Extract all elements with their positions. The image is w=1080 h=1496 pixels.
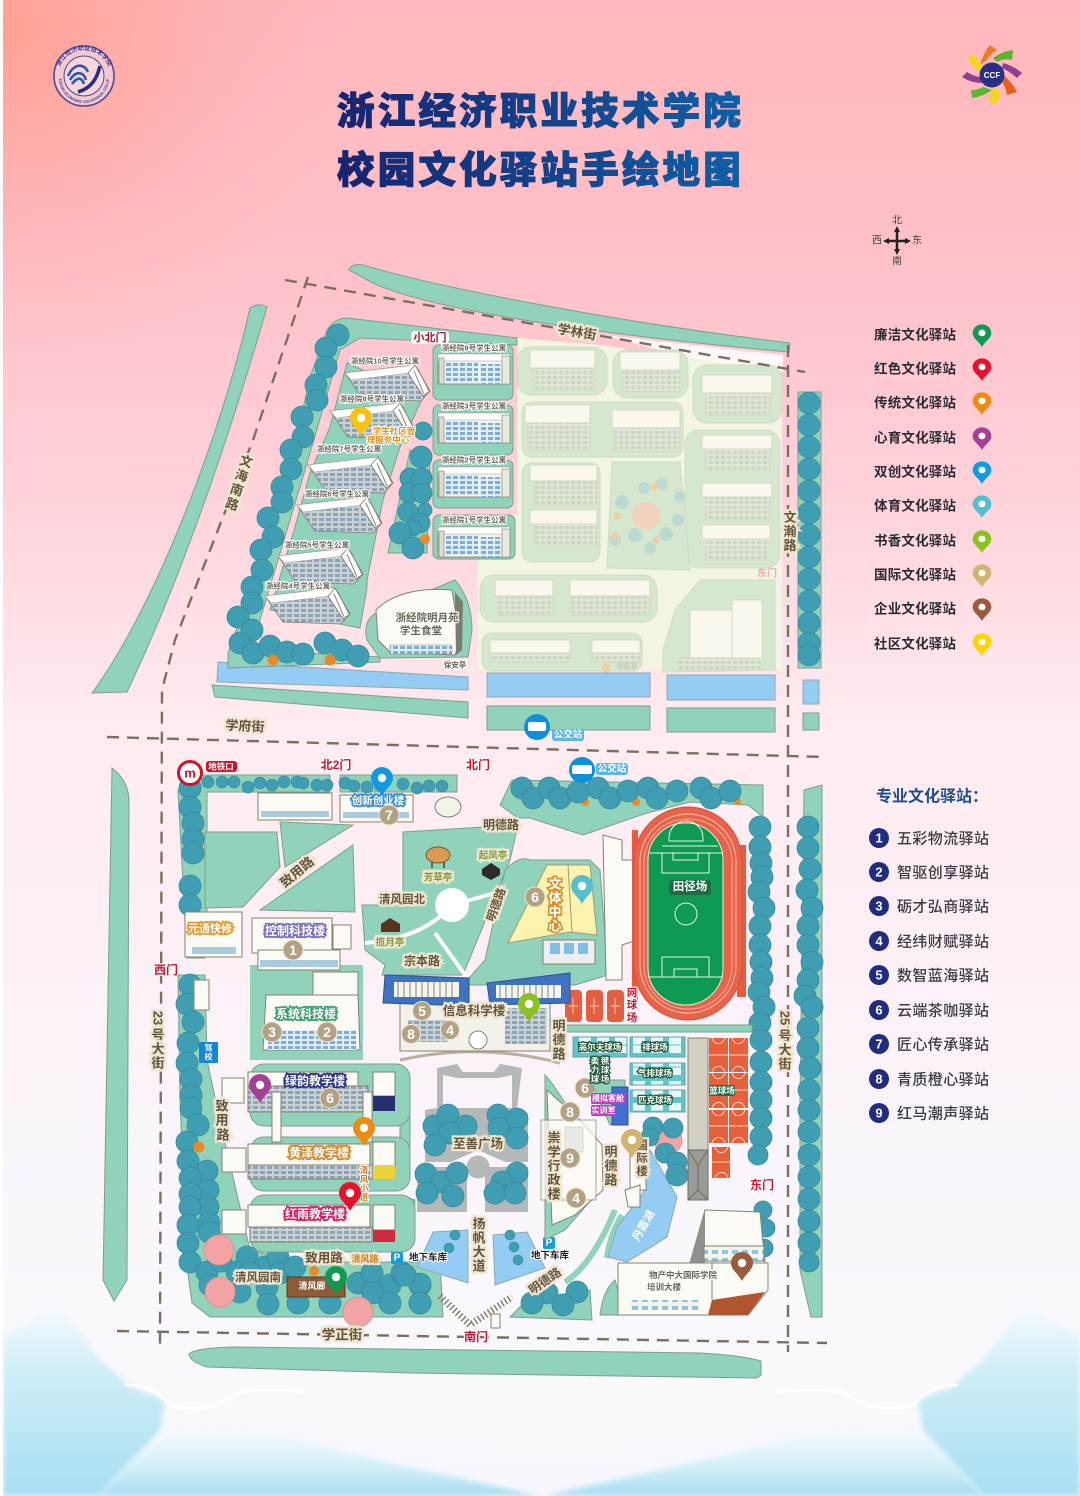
administration building: 行 (547, 1158, 561, 1174)
pin: innovation station (371, 767, 393, 796)
sports and arts centre (508, 865, 597, 964)
international building small: 际 (636, 1151, 648, 1165)
tennis courts: 场 (627, 1011, 638, 1024)
parking east: 地下车库 (531, 1250, 569, 1262)
list item 7 (869, 1034, 989, 1054)
list item 9 (869, 1103, 989, 1123)
upper map labels: 文 (783, 510, 797, 524)
badge 4 admin: 4 (572, 1190, 580, 1206)
east street label: 街 (778, 1056, 792, 1072)
badge 6 teaching: 6 (326, 1090, 334, 1106)
faded eastern dormitory zone (478, 335, 783, 672)
legend item: sports (874, 495, 991, 518)
south-west labels: 清风路 (351, 1253, 379, 1264)
compass (872, 214, 922, 268)
south-west labels: 致用路 (305, 1250, 343, 1265)
east street label (778, 1011, 792, 1072)
dorm zone: orange shrubs (268, 534, 430, 666)
international building small: 国 (636, 1139, 648, 1152)
metro entrance (178, 761, 237, 784)
parking east: P (546, 1238, 553, 1248)
administration building: 崇 (547, 1130, 561, 1146)
compass: 东 (912, 234, 922, 246)
list item 2: 2 (875, 864, 883, 880)
south-west labels: 用 (215, 1112, 229, 1128)
campus: pink trees (204, 1126, 682, 1327)
badge 9 admin (560, 1148, 580, 1168)
campus: north tree band (178, 775, 763, 1320)
sports courts: 毽 (601, 1056, 610, 1066)
badge 2: 2 (323, 1024, 331, 1040)
compass: 西 (872, 236, 882, 246)
bus stop lower (569, 757, 628, 783)
simulated cabin training room: 模拟客舱 (592, 1093, 624, 1103)
upper map labels: 路 (224, 495, 241, 513)
metro entrance: m (184, 766, 196, 780)
yellow-ze teaching building: 道 (360, 1192, 369, 1202)
list item 3: 3 (875, 898, 883, 914)
simulated cabin training room: 实训室 (592, 1105, 616, 1115)
sports courts: 柔 (591, 1056, 600, 1066)
plaza labels: 至善广场 (453, 1136, 503, 1151)
list item 2: 智驱创享驿站 (897, 864, 989, 882)
pin: integrity station (325, 1266, 347, 1295)
dormitory buildings: 浙经院1号学生公寓 (442, 514, 506, 524)
administration building: 路 (604, 1172, 618, 1188)
sports and arts centre: 心 (548, 918, 562, 934)
tennis courts: 球 (627, 998, 638, 1011)
badge 4 info (440, 1020, 460, 1040)
lawn road label: 致用路 (277, 854, 317, 890)
pin: heart station (249, 1074, 271, 1103)
list item 3 (869, 896, 989, 916)
pin: book fragrance station (518, 993, 540, 1022)
international building small: 楼 (636, 1164, 648, 1178)
title: 校园文化驿站手绘地图 (337, 149, 744, 191)
legend item: enterprise (874, 598, 991, 621)
campus: west and south trees (176, 777, 431, 1315)
zhishan plaza (417, 1064, 528, 1212)
west street label: 大 (151, 1042, 165, 1056)
compass: 南 (892, 254, 902, 268)
badge 3 (262, 1022, 282, 1042)
badge 5: 5 (418, 1003, 426, 1019)
control technology building: 控制科技楼 (265, 923, 325, 938)
yellow-ze teaching building (222, 1142, 395, 1202)
sports and arts centre: 体 (548, 890, 562, 906)
south-west labels: 路 (216, 1128, 230, 1142)
legend item: community (874, 633, 991, 656)
legend item: tradition (874, 392, 991, 415)
plaza labels: 扬 (472, 1216, 486, 1232)
legend item: enterprise: 企业文化驿站 (874, 600, 956, 616)
long covered building (688, 1038, 708, 1200)
legend heading: 专业文化驿站： (876, 786, 988, 806)
pin: international station (621, 1129, 643, 1158)
badge 6 cabin (575, 1078, 595, 1098)
list item 8: 青质橙心驿站 (897, 1072, 989, 1088)
gate labels: 东门 (750, 1177, 774, 1192)
pin: red station (339, 1182, 361, 1211)
list item 4 (869, 931, 989, 951)
pin: community station: 理服务中心 (367, 435, 410, 445)
central garden: 明德路 (483, 817, 519, 832)
dorm zone: trees (227, 324, 432, 667)
bus stop upper: 公交站 (554, 728, 583, 740)
list item 4: 经纬财赋驿站 (897, 934, 989, 950)
green rhyme teaching building: 绿韵教学楼 (285, 1073, 345, 1088)
metro entrance: 地铁口 (208, 762, 234, 772)
badge 9 admin: 9 (566, 1150, 574, 1166)
dormitory buildings: 浙经院4号学生公寓 (266, 580, 330, 590)
list item 5: 数智蓝海驿站 (897, 966, 989, 984)
north buildings: 创新创业楼 (352, 794, 405, 807)
south-west labels: 清风园南 (235, 1270, 281, 1284)
faded eastern dormitory zone: 保安亭 (616, 662, 638, 670)
legend item: international: 国际文化驿站 (874, 566, 956, 582)
information science building: 信息科学楼 (443, 1003, 506, 1018)
list item 4: 4 (875, 934, 883, 948)
administration building: 德 (552, 1032, 566, 1048)
central garden (365, 817, 519, 975)
danfeng lake (608, 1150, 677, 1262)
parking east (526, 1237, 569, 1297)
sports courts: 高尔夫球场 (579, 1042, 622, 1052)
east street label: 大 (778, 1042, 792, 1058)
badge 6 teaching (320, 1088, 340, 1108)
legend item: heart: 心育文化驿站 (874, 430, 956, 446)
central garden: 宗本路 (404, 953, 440, 968)
bus stop upper (524, 714, 584, 741)
legend item: heart (874, 427, 991, 450)
small west building and driving school (194, 980, 218, 1063)
east roadside trees (748, 392, 823, 1272)
legend item: integrity: 廉洁文化驿站 (874, 326, 956, 342)
teaching building greens (250, 1064, 415, 1252)
yellow-ze teaching building: 小 (360, 1183, 369, 1193)
map: canals (217, 662, 819, 704)
parking west (391, 1252, 447, 1264)
pin: community station: 学生社区管 (373, 426, 416, 436)
south-west labels: 学正街 (322, 1326, 363, 1342)
badge 1: 1 (289, 942, 297, 958)
north buildings (258, 793, 461, 822)
sports courts: 球 (591, 1074, 600, 1084)
canteen building: 浙经院明月苑 (396, 611, 459, 624)
sports courts: 排球场 (642, 1042, 668, 1052)
central garden: 起凤亭 (479, 850, 507, 862)
red-rain teaching building: 红雨教学楼 (285, 1206, 345, 1221)
parking west: 地下车库 (409, 1252, 447, 1264)
list item 6 (869, 1000, 989, 1020)
canteen building: 保安亭 (444, 660, 467, 670)
wuchan zhongda training building: 培训大楼 (647, 1282, 681, 1292)
information science building (383, 973, 570, 1051)
list item 8 (869, 1069, 989, 1089)
sports courts: 力 (591, 1065, 599, 1075)
system technology building (263, 972, 360, 1050)
south-west labels (215, 1098, 379, 1342)
sports courts: 场 (601, 1074, 610, 1084)
administration building: 楼 (547, 1186, 561, 1202)
plaza labels: 大 (472, 1244, 486, 1260)
CCF pinwheel logo (962, 45, 1022, 105)
upper map labels: 海 (233, 466, 250, 484)
sports and arts centre: 中 (548, 904, 562, 920)
east trees by international building (641, 1117, 688, 1186)
plaza trees (394, 1104, 588, 1316)
pin: sports station (571, 875, 593, 904)
bus stop lower: 公交站 (598, 762, 627, 774)
list item 9: 红马潮声驿站 (897, 1104, 989, 1122)
basketball courts (709, 1038, 748, 1178)
administration building: 德 (604, 1158, 618, 1174)
upper map labels (224, 321, 797, 735)
clean breeze corridor (287, 1277, 345, 1297)
danfeng lake: 丹霞湖 (629, 1208, 657, 1243)
dormitory buildings: 浙经院7号学生公寓 (317, 444, 381, 454)
parking west: P (394, 1252, 401, 1264)
yellow-ze teaching building: 清 (360, 1165, 369, 1175)
title (337, 90, 744, 191)
campus: north main trees (511, 777, 741, 809)
list item 7: 匠心传承驿站 (897, 1036, 989, 1054)
list item 1: 五彩物流驿站 (897, 830, 989, 848)
tennis courts: 网 (627, 987, 637, 999)
title: 浙江经济职业技术学院 (337, 90, 744, 132)
green rhyme teaching building (222, 1072, 395, 1142)
list item 6: 云端茶咖驿站 (897, 1002, 989, 1020)
legend: professional culture stations (869, 786, 989, 1123)
stadium (603, 807, 746, 1020)
small west building and driving school: 驾 (204, 1042, 212, 1052)
legend item: integrity (874, 324, 991, 347)
badge 5 (412, 1002, 432, 1020)
badge 8 admin (560, 1102, 580, 1122)
canteen building: 学生食堂 (400, 624, 442, 637)
badge 8 info (402, 1024, 420, 1044)
list item 1 (869, 828, 989, 848)
gate labels (154, 757, 774, 1344)
list item 2 (869, 862, 989, 882)
ponds (417, 1230, 545, 1328)
legend: culture stations (874, 324, 991, 656)
east street label: 号 (778, 1028, 792, 1044)
sports and arts centre: 文 (548, 876, 562, 892)
administration building: 政 (547, 1172, 561, 1188)
south-west labels: 致 (215, 1098, 229, 1114)
yellow-ze teaching building: 黄泽教学楼 (289, 1145, 349, 1160)
upper map labels: 南 (228, 480, 245, 499)
badge 1 (283, 940, 303, 960)
dormitory buildings: 浙经院10号学生公寓 (351, 356, 419, 366)
list item 8: 8 (875, 1072, 883, 1086)
map: green street strips (92, 265, 822, 1378)
list item 3: 砺才弘商驿站 (897, 898, 989, 916)
gate labels: 南门 (464, 1329, 488, 1344)
tennis courts (565, 987, 638, 1024)
dormitory buildings: 浙经院8号学生公寓 (340, 394, 404, 404)
system technology building: 系统科技楼 (276, 1006, 336, 1021)
control technology building (250, 918, 363, 1060)
badge 8 admin: 8 (566, 1104, 574, 1120)
stadium: 田径场 (673, 880, 708, 893)
legend item: innovation (874, 461, 991, 484)
central garden: 芳草亭 (424, 872, 452, 884)
wuchan zhongda training building: 物产中大国际学院 (649, 1270, 717, 1280)
repair shop (185, 912, 242, 957)
dormitory buildings (265, 342, 510, 624)
upper map labels: 瀚 (783, 524, 797, 538)
sports courts: 匹克球场 (638, 1095, 672, 1105)
administration building: 学 (547, 1144, 561, 1160)
school logo: 浙江经济职业技术学院 (56, 45, 112, 66)
upper map labels: 小北门 (414, 330, 446, 344)
faded eastern dormitory zone: 东门 (757, 566, 777, 580)
east street label: 25 (778, 1011, 792, 1025)
legend item: international (874, 564, 991, 587)
badge 7: 7 (385, 807, 393, 823)
administration building (541, 1018, 618, 1240)
gate labels: 西门 (154, 962, 178, 977)
school logo (53, 45, 115, 107)
dormitory buildings: 浙经院9号学生公寓 (442, 342, 506, 352)
pin: enterprise station (731, 1252, 753, 1281)
plaza labels: 帆 (472, 1230, 486, 1246)
pin: tradition station (353, 1117, 375, 1146)
badge 6 sports: 6 (531, 889, 539, 905)
dormitory buildings: 浙经院6号学生公寓 (305, 488, 369, 498)
central garden: 清风园北 (379, 892, 425, 906)
upper map labels: 文 (238, 452, 255, 470)
badge 6 sports (525, 887, 545, 907)
sports courts (573, 1037, 685, 1112)
list item 5: 5 (875, 968, 883, 982)
yellow-ze teaching building: 风 (360, 1174, 369, 1184)
badge 6 cabin: 6 (581, 1080, 589, 1096)
legend item: community: 社区文化驿站 (874, 636, 956, 652)
badge 8 info: 8 (407, 1026, 415, 1042)
sports courts: 球 (601, 1065, 610, 1075)
west street label (150, 1011, 166, 1070)
simulated cabin training room (590, 1080, 628, 1125)
plaza labels: 道 (472, 1258, 486, 1274)
small west building and driving school: 校 (204, 1052, 212, 1062)
legend item: tradition: 传统文化驿站 (874, 394, 956, 410)
wuchan zhongda training building (600, 1210, 768, 1315)
west street label: 号 (151, 1028, 165, 1042)
plaza labels (453, 1136, 503, 1274)
map: street dashed lines (107, 277, 827, 1352)
clean breeze corridor: 清风廊 (298, 1280, 326, 1291)
legend item: book (874, 530, 991, 553)
upper map labels: 学林街 (556, 321, 598, 343)
administration building: 明 (604, 1144, 618, 1160)
CCF pinwheel logo: CCF (984, 71, 1000, 80)
legend item: sports: 体育文化驿站 (874, 498, 956, 514)
administration building: 明 (552, 1018, 566, 1034)
badge 2 (317, 1022, 337, 1042)
badge 4 admin (566, 1188, 586, 1208)
badge 4 info: 4 (446, 1022, 454, 1038)
list item 1: 1 (875, 830, 883, 846)
repair shop: 元通快修 (188, 921, 232, 935)
dormitory buildings: 浙经院5号学生公寓 (285, 540, 349, 550)
parking east: 明德路 (526, 1264, 564, 1297)
list item 9: 9 (875, 1106, 883, 1120)
upper map labels: 学府街 (225, 717, 265, 735)
legend item: red: 红色文化驿站 (874, 360, 956, 376)
international building small (625, 1139, 648, 1207)
campus: orange shrubs (194, 797, 741, 1276)
central garden: 明德路 (484, 886, 509, 923)
list item 5 (869, 965, 989, 985)
legend item: red (874, 358, 991, 381)
legend item: book: 书香文化驿站 (874, 532, 956, 548)
canteen building (376, 589, 467, 670)
central garden: 揽月亭 (376, 936, 404, 948)
legend item: innovation: 双创文化驿站 (874, 464, 956, 480)
west street label: 街 (151, 1056, 165, 1070)
red-rain teaching building (222, 1205, 395, 1242)
compass: 北 (892, 214, 902, 226)
gate labels: 北2门 (321, 757, 351, 772)
list item 7: 7 (875, 1036, 883, 1052)
pin: community station (350, 407, 416, 445)
list item 6: 6 (875, 1002, 883, 1018)
west street label: 23 (150, 1011, 166, 1025)
campus: small north trees (202, 776, 448, 794)
dorm zone: green grounds (228, 318, 517, 668)
gate labels: 北门 (466, 757, 490, 772)
administration building: 路 (552, 1046, 566, 1062)
badge 7 (379, 805, 399, 825)
dormitory buildings: 浙经院2号学生公寓 (442, 454, 506, 464)
badge 3: 3 (268, 1024, 276, 1040)
dormitory buildings: 浙经院3号学生公寓 (442, 400, 506, 410)
upper map labels: 路 (783, 538, 797, 552)
sports courts: 气排球场 (638, 1068, 672, 1078)
basketball courts: 篮球场 (709, 1086, 735, 1096)
